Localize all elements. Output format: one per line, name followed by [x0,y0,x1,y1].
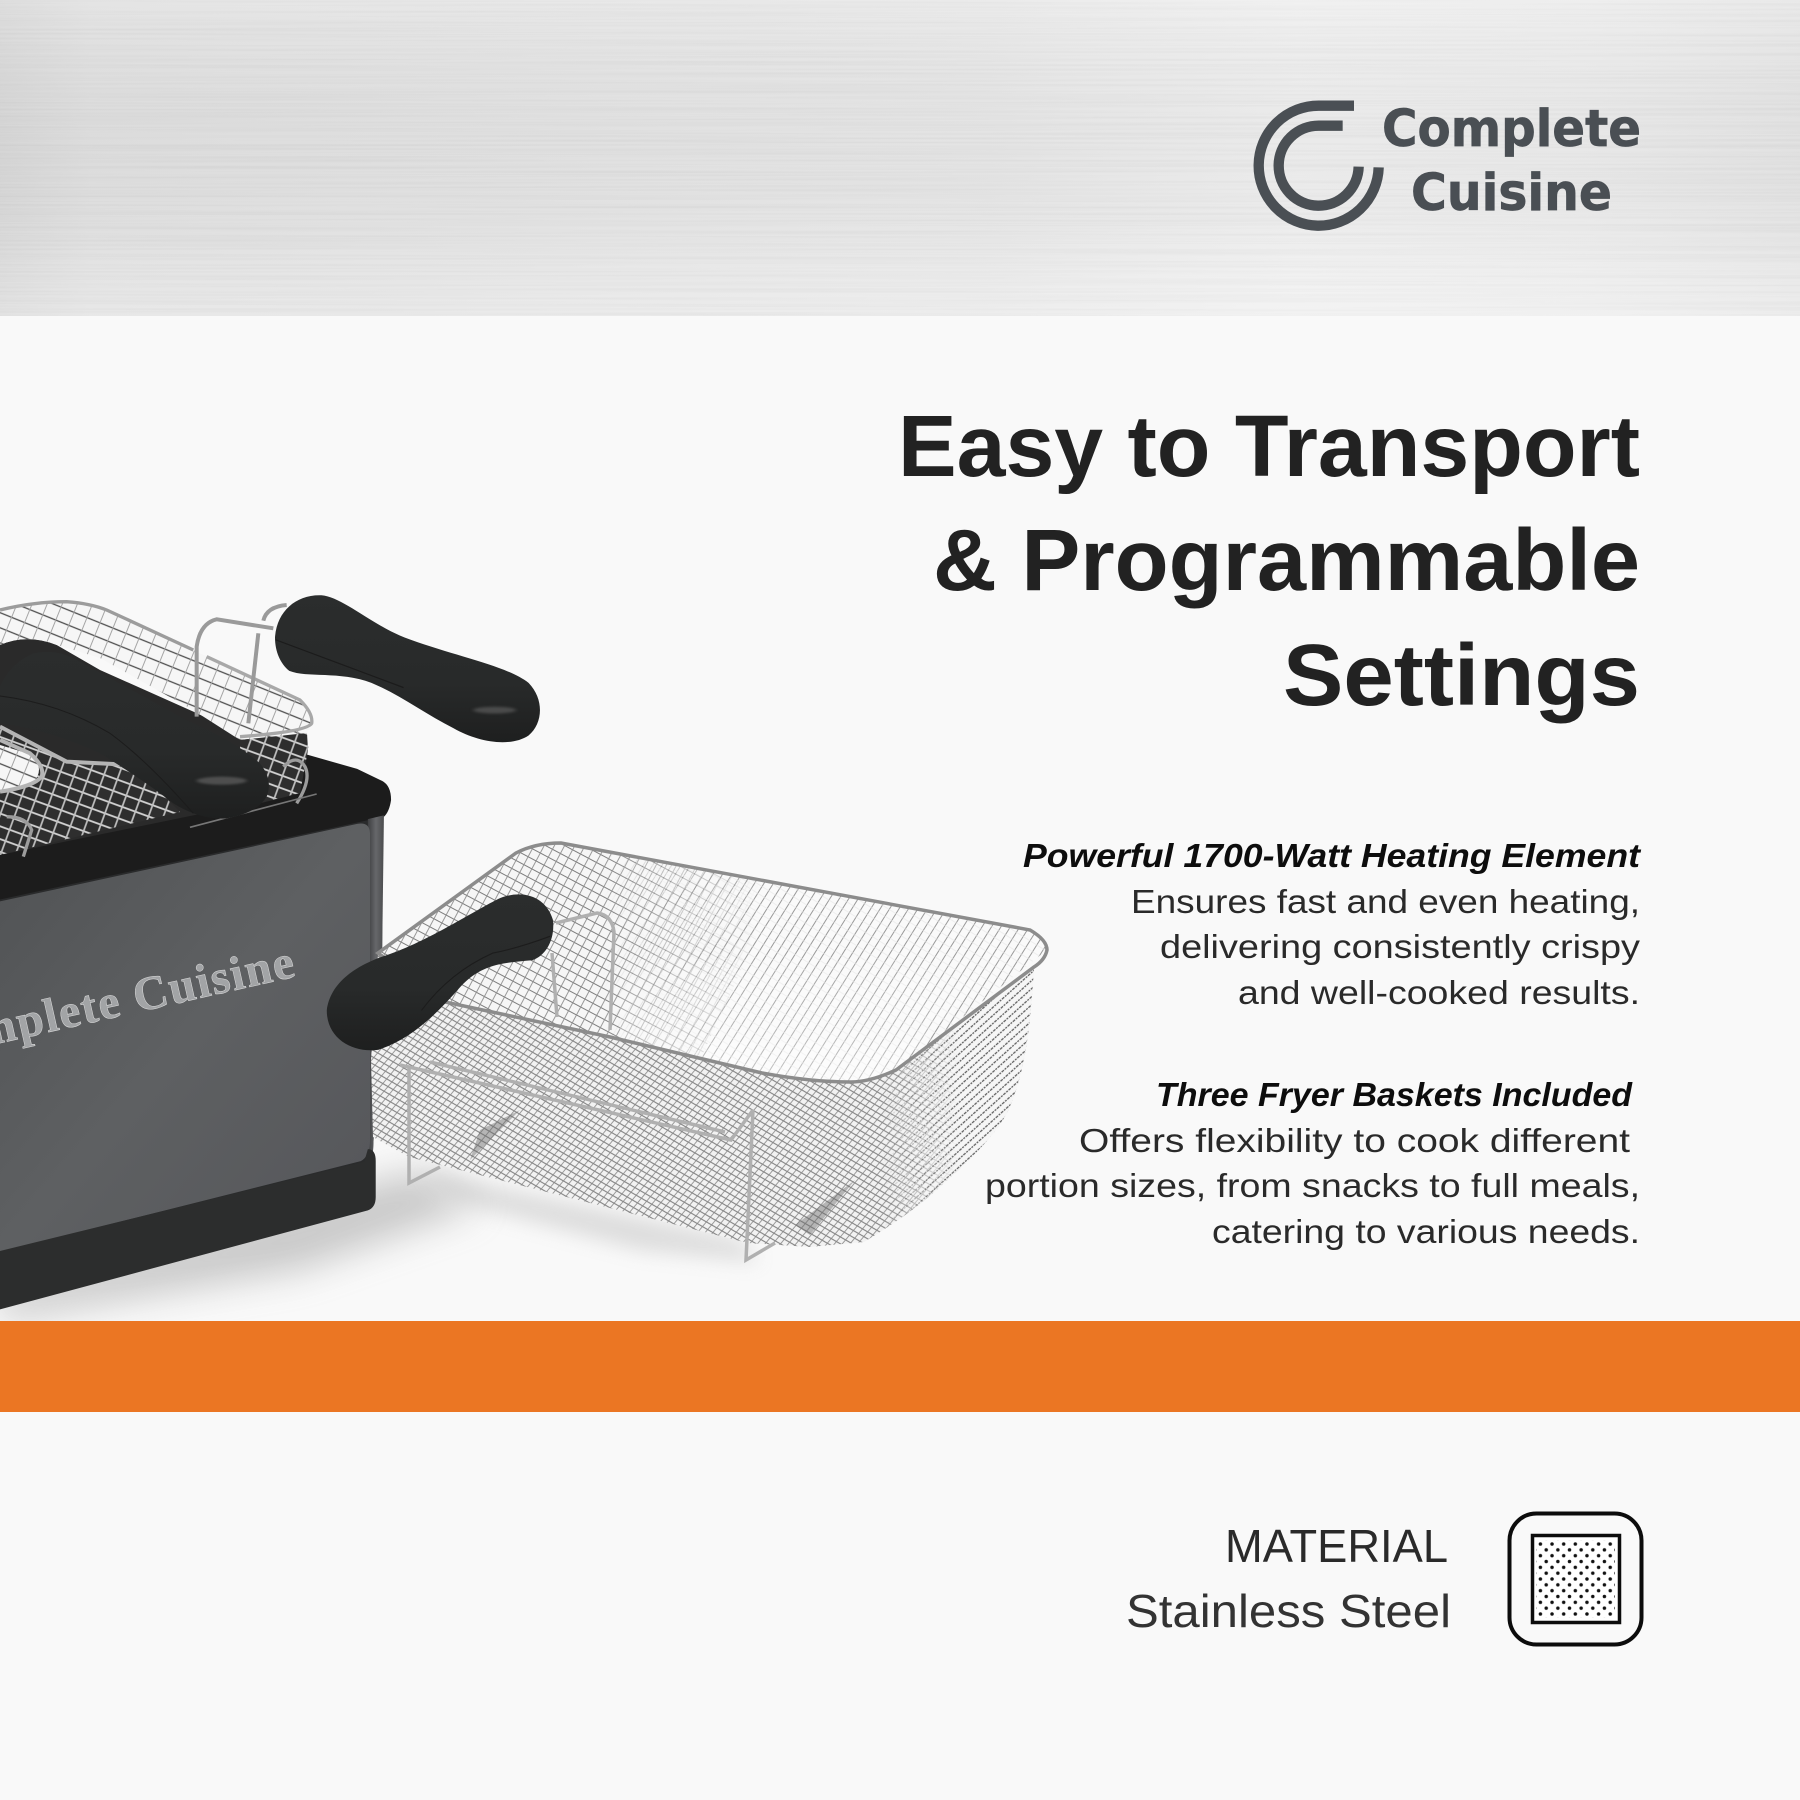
logo wordmark: Cuisine [1411,164,1612,223]
feature body [985,1122,1640,1250]
dark mesh accents [470,1110,855,1235]
logo wordmark [1382,100,1641,223]
feature body: portion sizes, from snacks to full meals, [985,1167,1640,1204]
material label: Stainless Steel [1126,1585,1451,1637]
handle: back basket [275,595,540,742]
mesh: left wall [381,844,750,1056]
fryer base [0,1149,376,1309]
feature body: Ensures fast and even heating, [1131,883,1640,920]
icon: stainless steel mesh [1510,1514,1642,1644]
basket rims and hooks [0,602,317,857]
title: Settings [1283,627,1640,724]
feature: 1700-watt heating element [1023,837,1642,1011]
fryer underlay [0,810,383,1259]
mesh: basket lower dark [0,725,180,855]
mesh: front wall [371,953,1034,1247]
mesh: basket right dark [240,733,308,803]
fryer front panel [0,824,370,1252]
material label: MATERIAL [1225,1520,1448,1572]
panel: back fryer basket [0,602,317,857]
fryer side panel [368,815,384,1154]
frame wires and feet [400,913,775,1260]
fryer top surface [0,755,391,900]
feature heading: Powerful 1700-Watt Heating Element [1023,837,1642,874]
header brushed steel band [0,0,1800,316]
mesh: interior glow [620,960,1000,1082]
handle: front basket [0,652,269,818]
title [898,398,1640,724]
mesh: right wall [884,969,1034,1226]
wire bracket of back basket [197,605,287,723]
material label [1126,1520,1451,1637]
panel: loose fryer basket [371,843,1047,1260]
feature: three fryer baskets [985,1076,1640,1250]
fryer body [0,755,391,1309]
floor shadows [0,1170,760,1320]
mesh: basket tray, dark interior [0,639,308,855]
feature body: and well-cooked results. [1238,974,1640,1011]
feature body [1131,883,1641,1011]
mesh: basket wall light [0,602,312,740]
logo: Complete Cuisine [1259,100,1641,226]
icon: double C mark [1259,106,1379,226]
rim wire [378,843,1047,1082]
orange divider band [0,1321,1800,1412]
feature body: Offers flexibility to cook different [1079,1122,1630,1159]
feature body: catering to various needs. [1212,1213,1640,1250]
handle: loose basket [327,894,553,1050]
feature body: delivering consistently crispy [1160,928,1641,965]
title: Easy to Transport [898,398,1640,495]
mesh: small left basket [0,745,39,792]
feature heading: Three Fryer Baskets Included [1156,1076,1633,1113]
illustration: fryer and basket [0,595,1047,1320]
mesh: back wall [378,843,1047,1082]
title: & Programmable [933,512,1640,609]
logo wordmark: Complete [1382,100,1641,159]
